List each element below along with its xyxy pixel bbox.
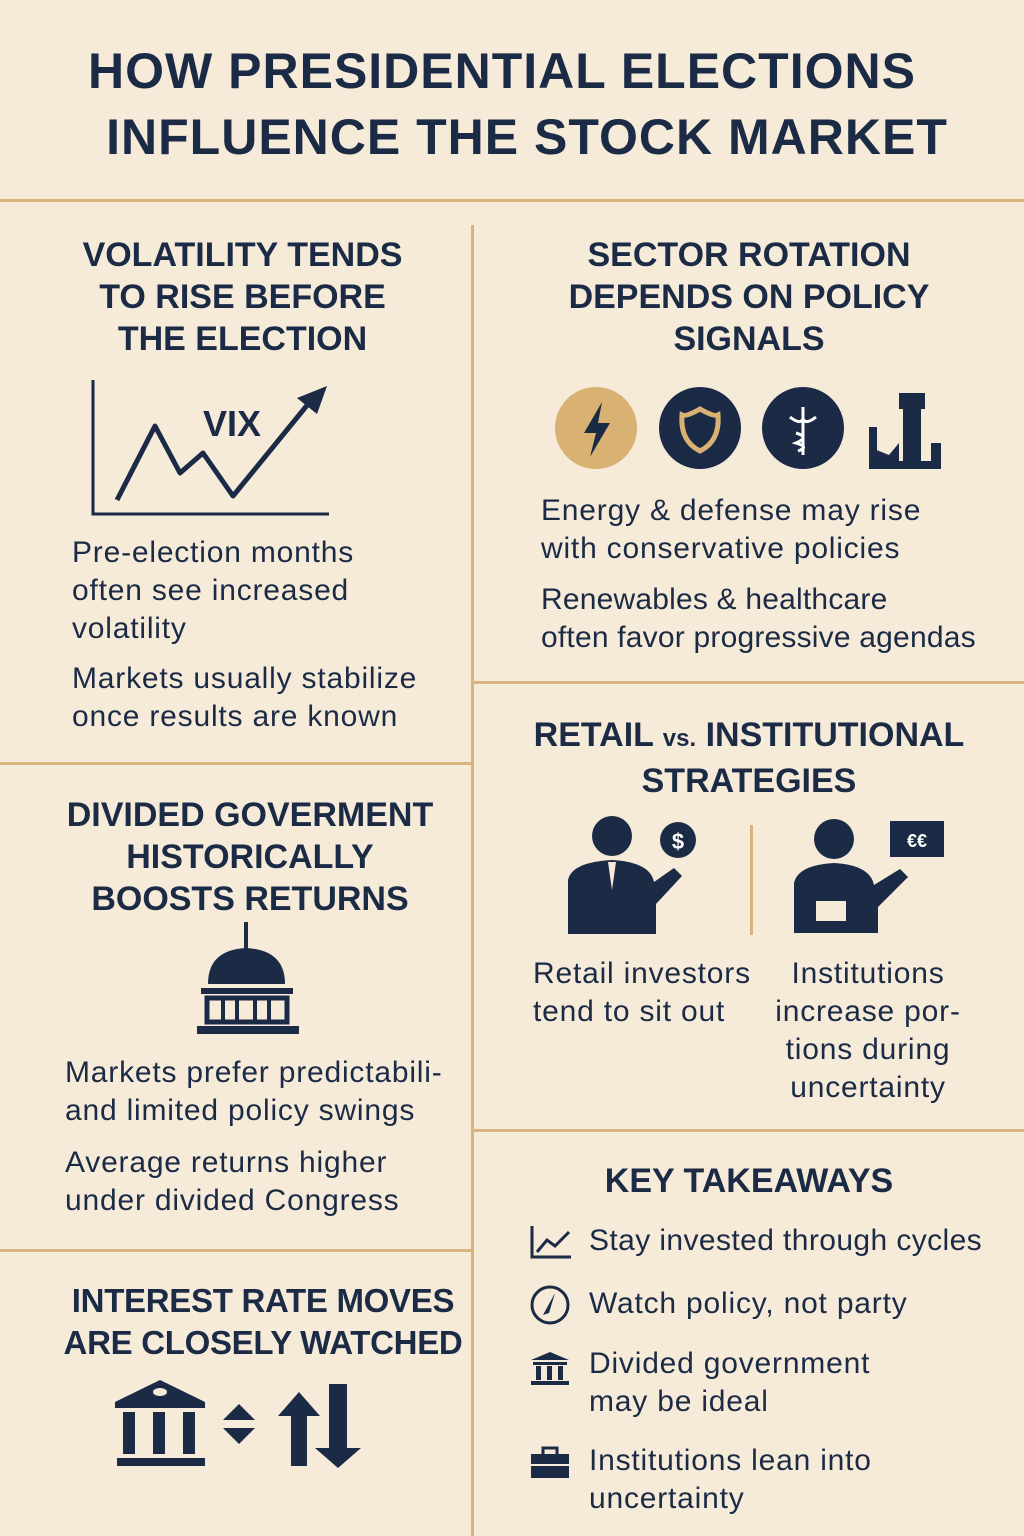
- text: institutions: [775, 957, 961, 1104]
- text: institutions: uncertainty: [790, 1071, 946, 1104]
- text: sector: Energy & defense may rise: [541, 494, 921, 527]
- heading: retail: RETAIL vs. INSTITUTIONAL: [534, 716, 964, 754]
- panel: sector rotation: Renewables & healthcare: [541, 583, 887, 616]
- title: INFLUENCE THE STOCK MARKET: [106, 109, 948, 165]
- panel: volatility: [72, 236, 417, 733]
- heading: interest: [64, 1282, 462, 1361]
- text: volatility: volatility: [72, 612, 187, 645]
- panel: key takeaways: [530, 1162, 982, 1515]
- takeaway 3: may be ideal: [589, 1385, 769, 1418]
- text: sector: [541, 494, 921, 565]
- icon: retail investor: [568, 816, 696, 934]
- heading: takeaways: KEY TAKEAWAYS: [605, 1162, 893, 1200]
- heading: sector: SECTOR ROTATION: [588, 236, 910, 274]
- panel: divided government: [65, 796, 443, 1217]
- icon: institutional investor: [794, 819, 944, 933]
- chart: VIX: VIX: [203, 403, 261, 444]
- text: divided: [65, 1056, 443, 1127]
- heading: divided: DIVIDED GOVERMENT: [67, 796, 433, 834]
- heading: divided: BOOSTS RETURNS: [91, 880, 409, 918]
- heading: interest: INTEREST RATE MOVES: [72, 1282, 454, 1319]
- text: divided: Markets prefer predictabili-: [65, 1056, 443, 1089]
- panel: interest rate: [64, 1282, 462, 1468]
- heading: volatility: VOLATILITY TENDS: [83, 236, 402, 274]
- text: institutions: increase por-: [775, 995, 961, 1028]
- title: HOW PRESIDENTIAL ELECTIONS: [88, 43, 916, 99]
- heading: interest: ARE CLOSELY WATCHED: [64, 1324, 462, 1361]
- heading: volatility: [82, 236, 402, 358]
- text: retail: Retail investors: [533, 957, 751, 990]
- panel: sector rotation: [541, 236, 976, 654]
- text: sector: with conservative policies: [541, 532, 900, 565]
- text: volatility: often see increased: [72, 574, 349, 607]
- icon: institutional investor: €€: [907, 831, 927, 851]
- text: volatility: [72, 536, 354, 645]
- text: retail: tend to sit out: [533, 995, 725, 1028]
- icon: capitol: [197, 922, 299, 1034]
- panel: volatility: Markets usually stabilize: [72, 662, 417, 695]
- takeaway 4: uncertainty: [589, 1482, 745, 1515]
- heading: sector: DEPENDS ON POLICY: [569, 278, 929, 316]
- text: volatility: Pre-election months: [72, 536, 354, 569]
- heading: divided: HISTORICALLY: [126, 838, 374, 876]
- text: retail: [533, 957, 751, 1028]
- takeaway 3: [531, 1347, 870, 1418]
- heading: divided: [67, 796, 433, 918]
- icons: sectors: [555, 387, 941, 469]
- panel: volatility: once results are known: [72, 700, 398, 733]
- takeaway 4: Institutions lean into: [589, 1444, 872, 1477]
- panel: sector rotation: often favor progressive agendas: [541, 621, 976, 654]
- heading: volatility: TO RISE BEFORE: [99, 278, 386, 316]
- takeaway 3: Divided government: [589, 1347, 870, 1380]
- text: institutions: Institutions: [791, 957, 944, 990]
- icon: bank and arrows: [115, 1380, 361, 1468]
- takeaway 1: Stay invested through cycles: [589, 1224, 982, 1257]
- takeaway 2: Watch policy, not party: [589, 1287, 908, 1320]
- text: institutions: tions during: [786, 1033, 950, 1066]
- chart: VIX: [92, 380, 329, 516]
- heading: retail: STRATEGIES: [642, 762, 856, 800]
- panel: divided government: Average returns higher: [65, 1146, 387, 1179]
- icon: retail investor: $: [672, 829, 684, 854]
- panel: divided government: under divided Congress: [65, 1184, 399, 1217]
- heading: sector: [569, 236, 929, 358]
- heading: volatility: THE ELECTION: [118, 320, 367, 358]
- heading: sector: SIGNALS: [673, 320, 825, 358]
- heading: retail: [534, 716, 964, 800]
- panel: retail vs institutional: [533, 716, 964, 1104]
- text: divided: and limited policy swings: [65, 1094, 415, 1127]
- takeaway 4: [531, 1444, 872, 1515]
- title: [88, 43, 948, 165]
